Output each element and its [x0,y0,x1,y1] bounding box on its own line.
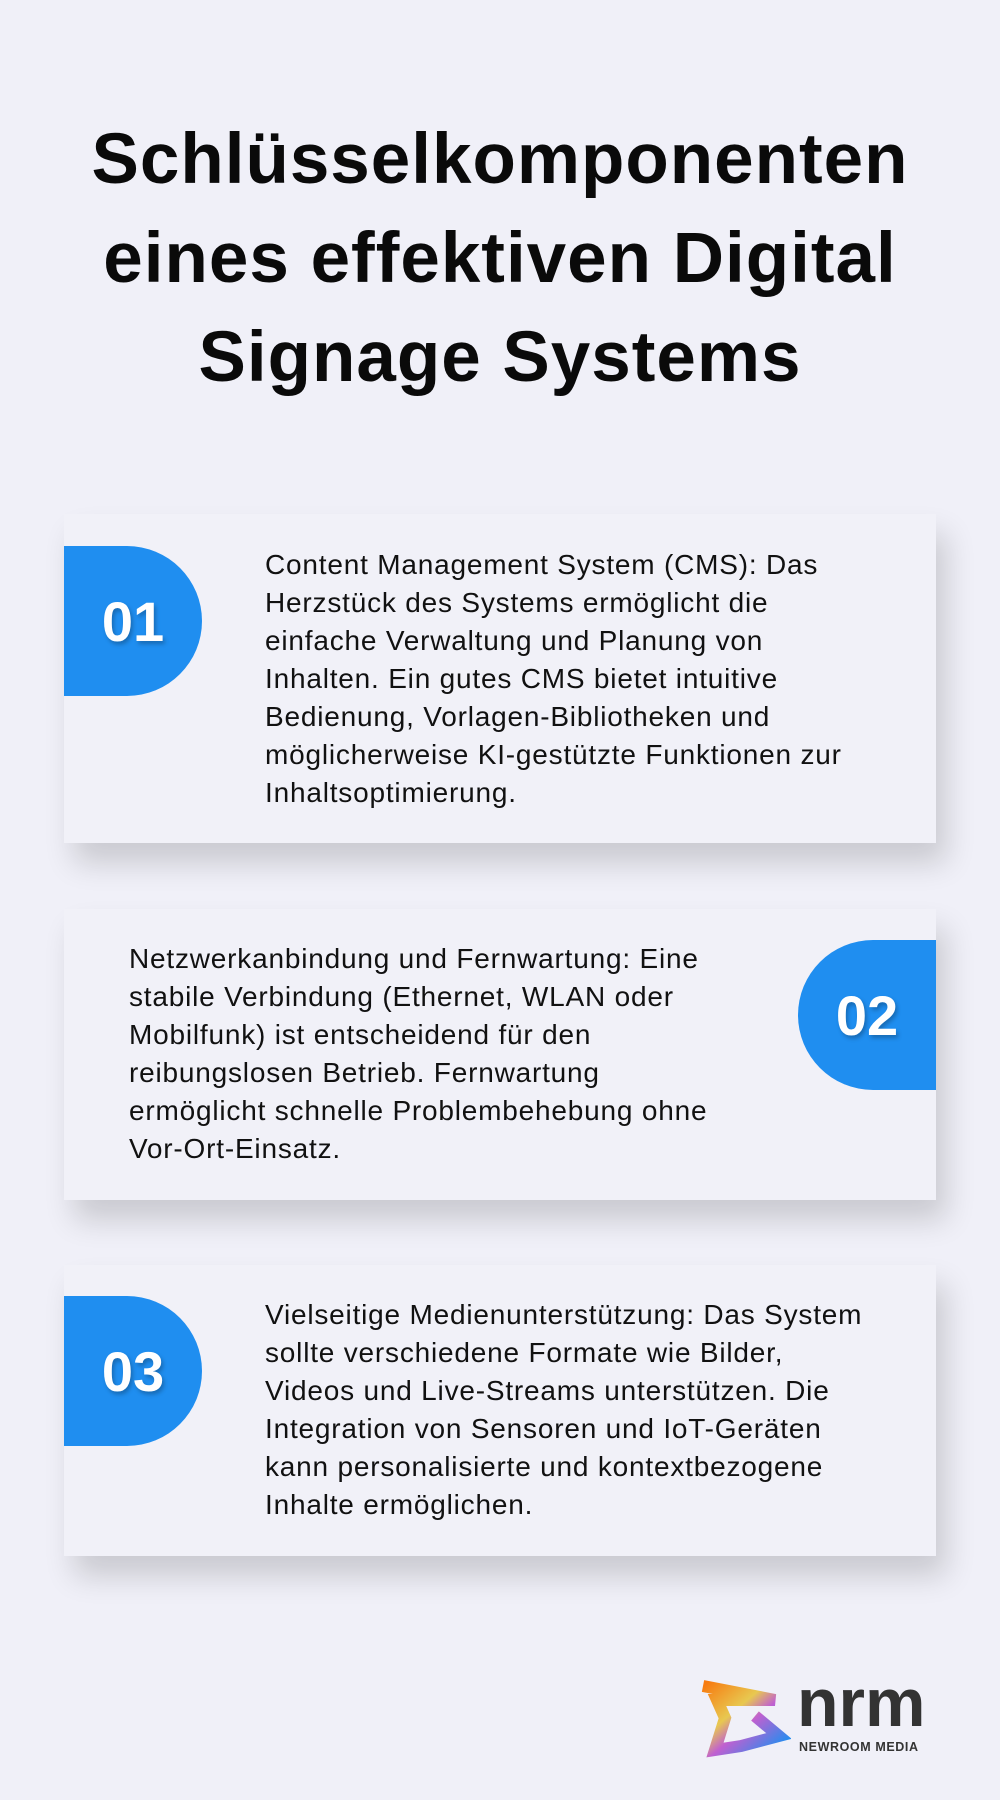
text block 2: Mobilfunk) ist entscheidend für den [129,1019,591,1050]
title: Signage Systems [199,318,801,397]
text block 1: Content Management System (CMS): Das [265,549,818,580]
text block 3: sollte verschiedene Formate wie Bilder, [265,1337,783,1368]
text block 2: reibungslosen Betrieb. Fernwartung [129,1057,600,1088]
logo text: nrm [797,1665,925,1741]
text block 2 [129,943,707,1164]
badge 01 [64,546,202,696]
text block 3: Vielseitige Medienunterstützung: Das System [265,1299,862,1330]
badge 02 [798,940,936,1090]
logo: NEWROOM MEDIA [799,1740,919,1754]
text block 3 [265,1299,862,1520]
panel: card 3 [64,1265,936,1556]
text block 3: kann personalisierte und kontextbezogene [265,1451,823,1482]
badge 03: 03 [102,1340,164,1402]
text block 1: einfache Verwaltung und Planung von [265,625,763,656]
text block 1: Inhaltsoptimierung. [265,777,517,808]
text block 2: ermöglicht schnelle Problembehebung ohne [129,1095,707,1126]
text block 1: möglicherweise KI-gestützte Funktionen zur [265,739,842,770]
icon: logo mark [702,1680,791,1758]
title [92,120,908,397]
text block 1: Inhalten. Ein gutes CMS bietet intuitive [265,663,778,694]
badge 03 [64,1296,202,1446]
text block 1: Bedienung, Vorlagen-Bibliotheken und [265,701,770,732]
text block 2: stabile Verbindung (Ethernet, WLAN oder [129,981,674,1012]
text block 3: Videos und Live-Streams unterstützen. Die [265,1375,830,1406]
text block 1 [265,549,842,808]
text block 3: Inhalte ermöglichen. [265,1489,533,1520]
text block 2: Netzwerkanbindung und Fernwartung: Eine [129,943,699,974]
badge 01: 01 [102,590,164,652]
panel: card 1 [64,514,936,843]
text block 2: Vor-Ort-Einsatz. [129,1133,341,1164]
title: eines effektiven Digital [103,219,897,298]
text block 1: Herzstück des Systems ermöglicht die [265,587,768,618]
text block 3: Integration von Sensoren und IoT-Geräten [265,1413,822,1444]
panel: card 2 [64,909,936,1200]
badge 02: 02 [836,984,898,1046]
logo [702,1665,925,1758]
title: Schlüsselkomponenten [92,120,908,199]
